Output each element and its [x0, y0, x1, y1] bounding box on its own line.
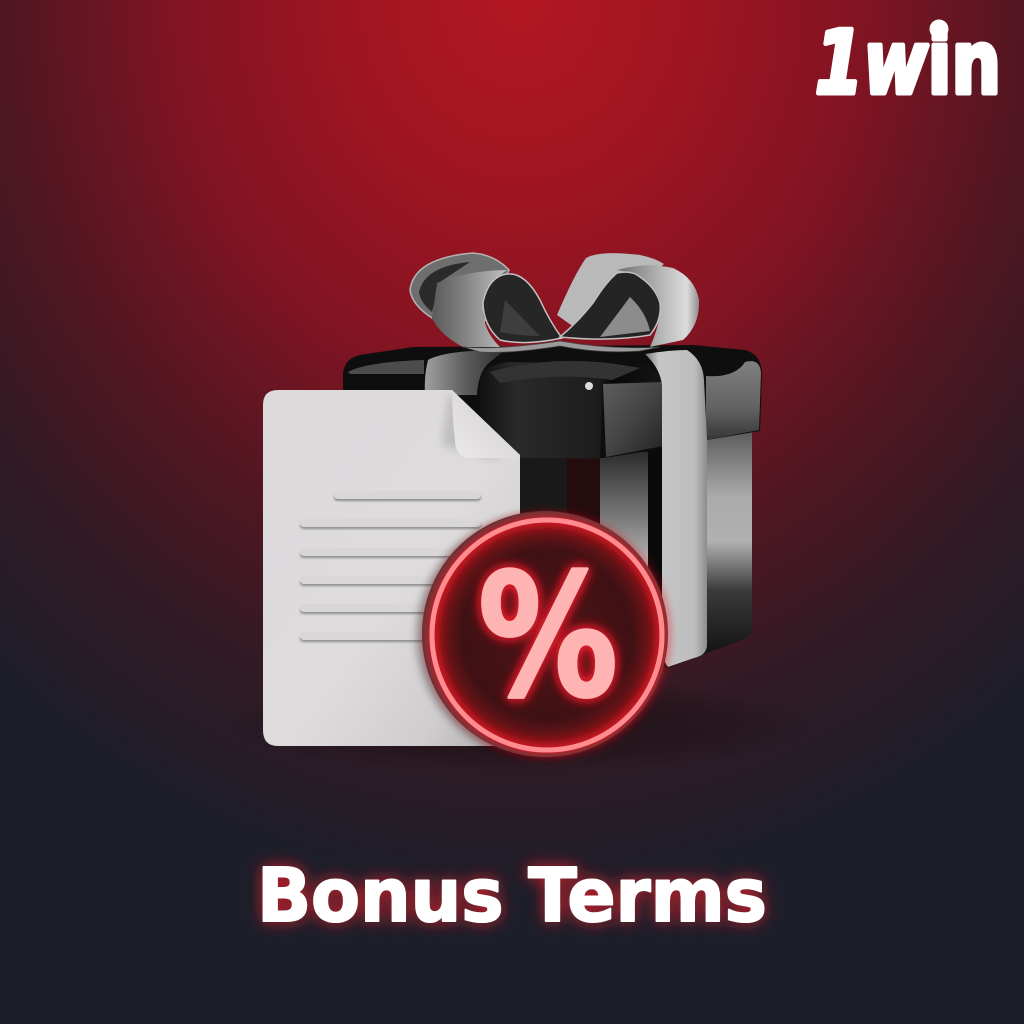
lid front — [480, 362, 663, 458]
bow: knot — [463, 341, 660, 352]
coin neon ring — [432, 520, 662, 750]
bow: back right loop — [557, 253, 664, 335]
gift box base — [520, 430, 752, 668]
document fold — [442, 390, 520, 462]
lid right face — [603, 382, 663, 457]
coin face — [429, 517, 665, 753]
gift box lid — [343, 345, 762, 458]
document text lines — [300, 491, 481, 642]
lid left of ribbon — [348, 360, 424, 374]
lid top reflection — [490, 361, 640, 383]
illustration: gift box — [343, 253, 762, 668]
coin rim — [422, 511, 668, 757]
bow: left loop — [410, 253, 562, 347]
percent coin — [416, 511, 668, 758]
illustration: document — [263, 390, 520, 746]
ribbon: top left — [425, 350, 505, 395]
lid far right face — [706, 361, 761, 440]
lid highlight — [585, 382, 593, 390]
floor shadow — [220, 677, 820, 773]
percent sign: % — [478, 538, 618, 736]
bow: right loop — [560, 265, 699, 347]
logo: 1win: 1win — [815, 12, 1001, 114]
title: Bonus Terms — [257, 853, 767, 939]
ribbon: vertical — [645, 350, 707, 667]
